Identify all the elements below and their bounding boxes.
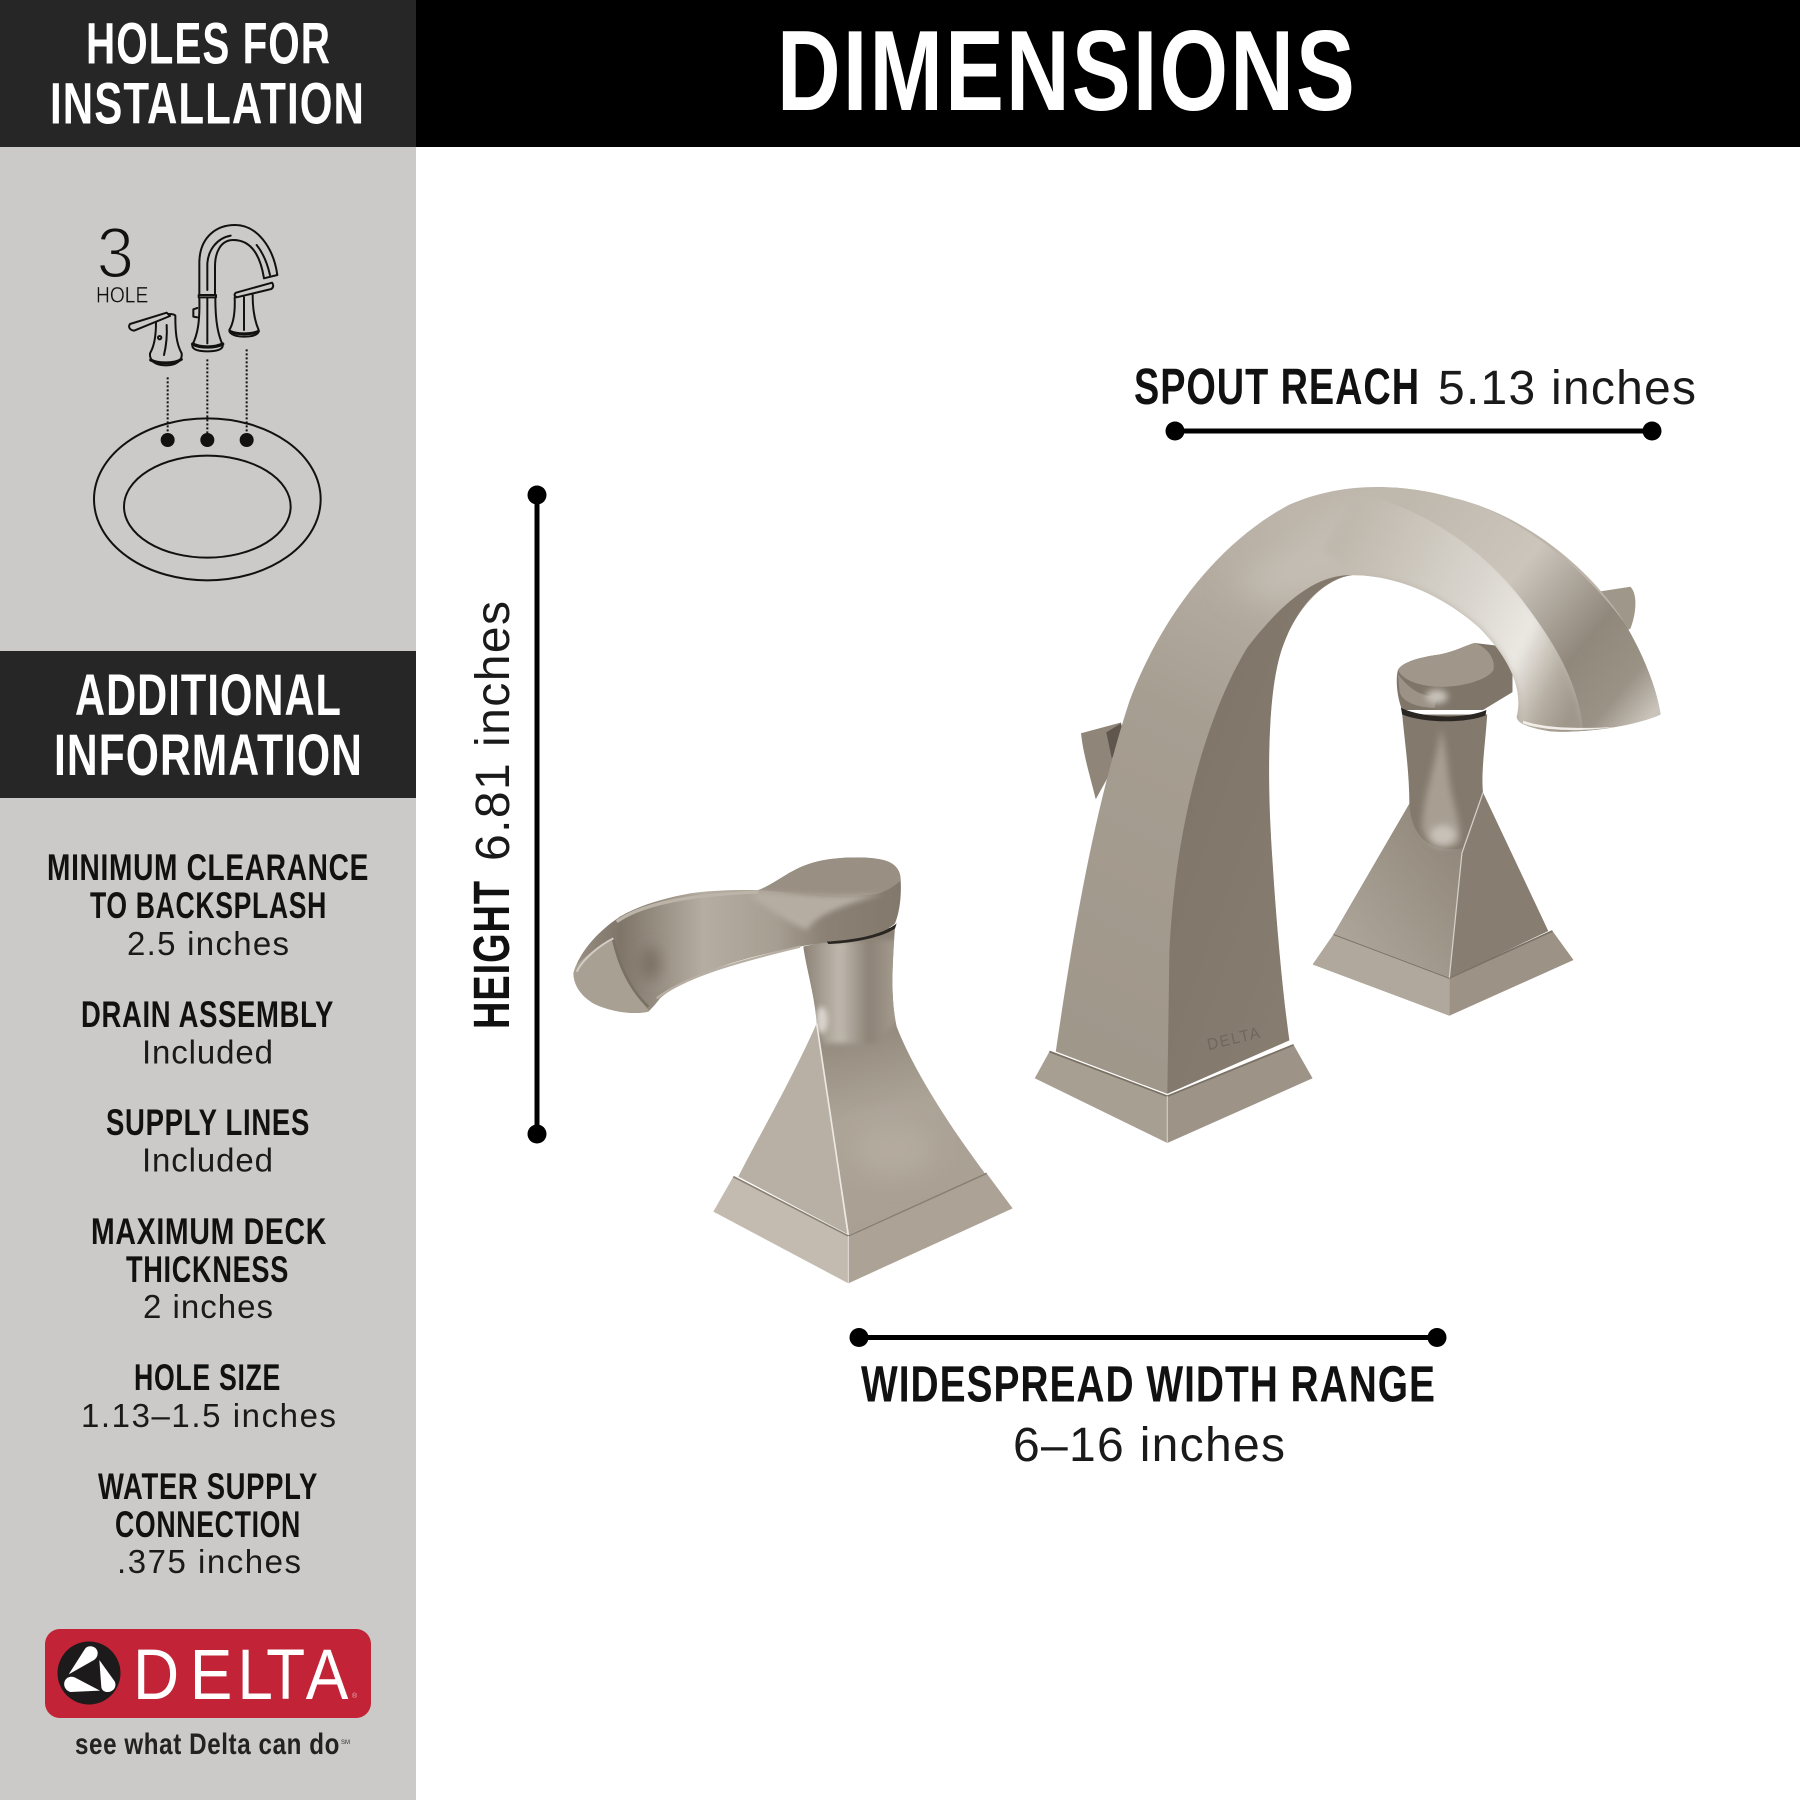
title: dimensions: DIMENSIONS [777,8,1357,135]
spout dark right face [1167,575,1353,1094]
spout [1056,487,1660,1094]
logo: delta [45,1629,371,1718]
dimension: widespread width range: 6–16 inches [1013,1419,1285,1472]
illustration: faucet spout with back handle [1034,487,1660,1143]
handle base right facet [848,1173,1013,1283]
back handle base [1313,934,1449,1016]
logo: delta: DELTA [133,1636,348,1715]
tagline: SM [341,1740,350,1746]
logo: delta: ® [352,1692,358,1700]
text block: drain assembly [81,994,334,1070]
heading: additional information: ADDITIONAL [75,663,342,728]
lever top and cap [758,857,903,896]
dimension: spout reach [1134,358,1696,440]
dimension: height: HEIGHT [463,880,520,1029]
text block: hole size: HOLE SIZE [134,1357,281,1398]
panel: left sidebar [0,147,416,1800]
illustration: front lever handle [570,853,1013,1283]
dimension: spout reach: SPOUT REACH [1134,358,1420,415]
spout outer band [1394,488,1660,731]
icon: three hole faucet and basin diagram: HOLE [96,282,148,307]
text block: hole size: 1.13–1.5 inches [81,1397,336,1434]
heading: holes for installation: HOLES FOR [86,12,331,76]
title: dimensions [416,0,1800,147]
spout tip highlight [1523,721,1613,730]
hidden back lever, left side [1081,723,1125,799]
spout base right facet [1167,1045,1313,1143]
text block: supply lines: Included [142,1142,273,1178]
heading: holes for installation: INSTALLATION [50,72,365,136]
heading: additional information [0,651,416,798]
text block: water supply connection: WATER SUPPLY [98,1466,318,1507]
text block: minimum clearance to backsplash: TO BACKSPLASH [90,885,327,926]
text block: supply lines [106,1102,310,1178]
text block: maximum deck thickness: THICKNESS [126,1249,289,1290]
lever end facet [573,940,649,1013]
dimension: height [463,486,546,1144]
lever [570,853,903,1020]
text block: minimum clearance to backsplash [47,847,369,962]
back handle lever and cap [1397,643,1512,710]
logo on body: DELTA [1206,1024,1263,1054]
heading: additional information: INFORMATION [54,723,363,788]
text block: water supply connection [98,1466,318,1580]
icon: three hole faucet and basin diagram: 3 [97,213,134,293]
text block: supply lines: SUPPLY LINES [106,1102,310,1143]
heading: holes for installation [0,0,416,147]
lever scoop shadow [640,947,660,980]
handle body right face [803,928,985,1234]
text block: water supply connection: .375 inches [117,1543,301,1580]
tagline: see what Delta can do [75,1728,340,1761]
text block: minimum clearance to backsplash: MINIMUM CLEARANCE [47,847,369,888]
lever lit band [750,892,883,930]
collar gap [827,923,897,944]
text block: maximum deck thickness: 2 inches [143,1288,273,1325]
back handle body [1334,714,1548,978]
text block: water supply connection: CONNECTION [115,1504,301,1545]
text block: maximum deck thickness: MAXIMUM DECK [91,1211,327,1252]
icon: three hole faucet and basin diagram [94,213,321,580]
dimension: height: 6.81 inches [467,601,520,861]
spout base left facet [1035,1052,1167,1143]
handle base left facet [713,1177,848,1283]
text block: drain assembly: DRAIN ASSEMBLY [81,994,334,1035]
back lever end, right side [1584,587,1635,639]
text block: maximum deck thickness [91,1211,327,1325]
text block: minimum clearance to backsplash: 2.5 inches [127,925,289,962]
text block: hole size [81,1357,336,1434]
dimension: widespread width range: WIDESPREAD WIDTH RANGE [861,1356,1436,1412]
dimension: spout reach: 5.13 inches [1438,362,1696,415]
handle body left face [738,1023,847,1234]
spout inner lit face [1374,508,1583,732]
dimension: widespread width range [850,1328,1446,1472]
text block: drain assembly: Included [142,1034,273,1070]
